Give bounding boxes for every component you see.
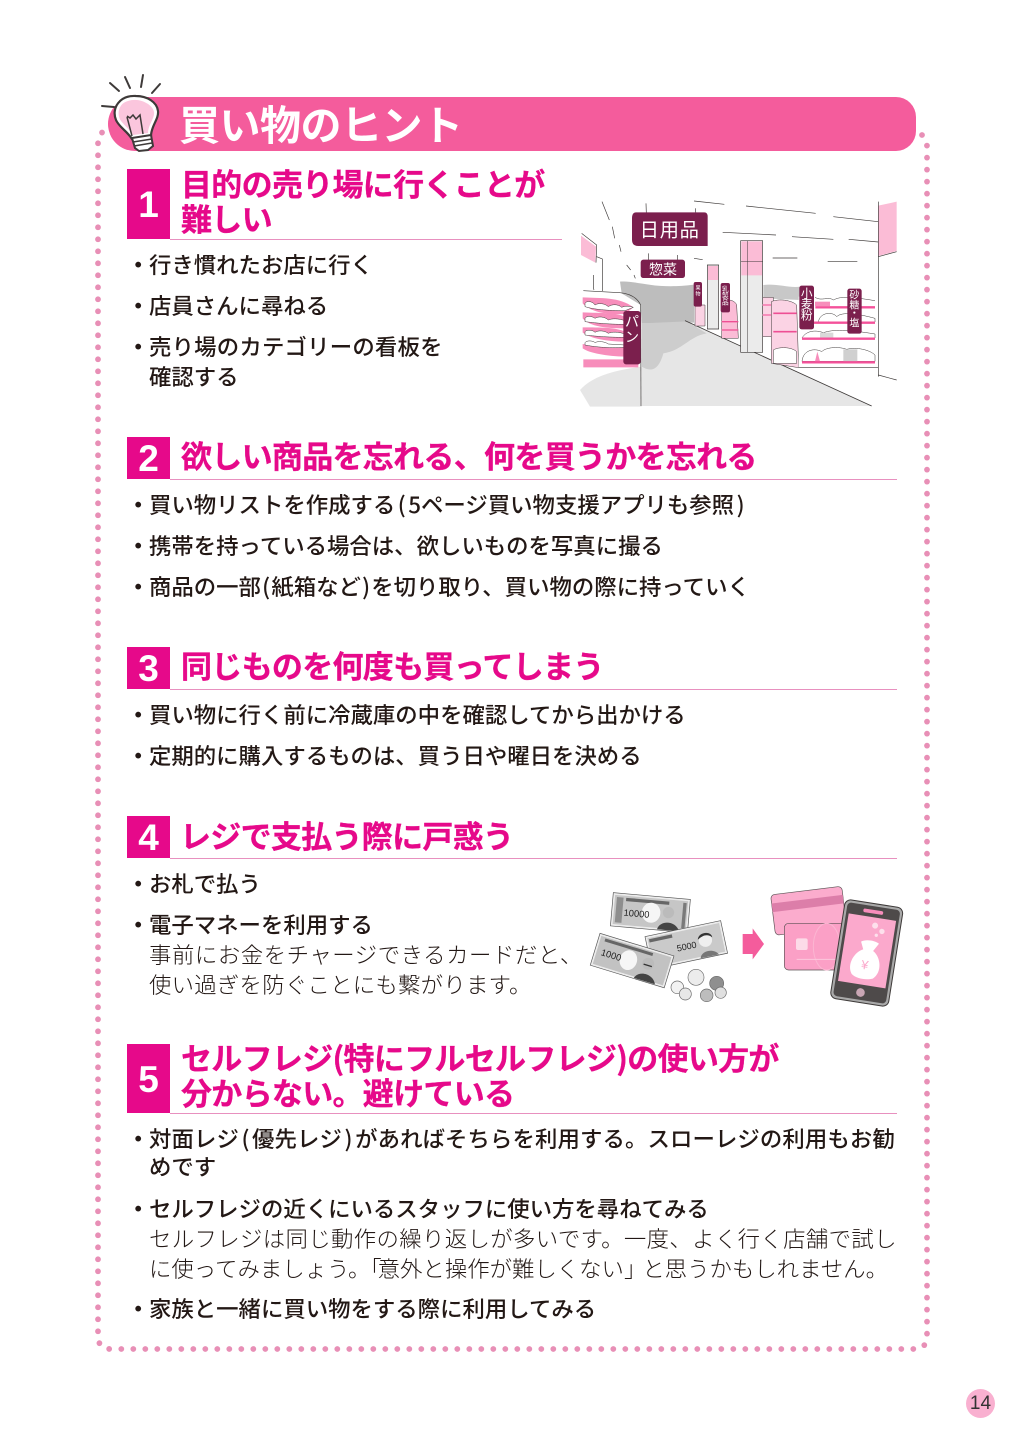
number 5: 5 xyxy=(138,1058,159,1100)
bullet: 買い物リストを作成する(5ページ買い物支援アプリも参照) xyxy=(149,488,745,520)
signs xyxy=(632,212,708,246)
page number: 14 xyxy=(970,1393,991,1414)
bullet: ・ xyxy=(127,908,149,940)
bullet: 電子マネーを利用する xyxy=(149,908,373,940)
illustration: store aisle: ン xyxy=(625,327,639,347)
bullet: ・ xyxy=(127,1292,149,1324)
explanation text: に使ってみましょう。「意外と操作が難しくない」と思うかもしれません。 xyxy=(149,1252,888,1284)
right shelves xyxy=(799,297,878,368)
bullet: お札で払う xyxy=(149,867,261,899)
coins xyxy=(671,969,726,1002)
bullet: ・ xyxy=(127,867,149,899)
illustration: store aisle: 惣菜 xyxy=(649,259,677,279)
illustration: store aisle xyxy=(580,200,897,406)
number 3 xyxy=(127,647,170,689)
bullet: ・ xyxy=(127,488,149,520)
heading 5: セルフレジ(特にフルセルフレジ)の使い方が xyxy=(181,1034,779,1079)
front card xyxy=(784,923,856,970)
phone: ¥ xyxy=(859,958,870,973)
illustration: store aisle: 果 xyxy=(695,284,701,291)
bullet: 携帯を持っている場合は、欲しいものを写真に撮る xyxy=(149,529,663,561)
title: 買い物のヒント xyxy=(179,92,462,152)
bullet: ・ xyxy=(127,248,149,280)
bullet: 商品の一部(紙箱など)を切り取り、買い物の際に持っていく xyxy=(149,570,750,602)
illustration: store aisle: 製 xyxy=(722,290,729,300)
illustration: store aisle: 日用品 xyxy=(640,214,700,242)
bullet: 買い物に行く前に冷蔵庫の中を確認してから出かける xyxy=(149,698,686,730)
bullet: 行き慣れたお店に行く xyxy=(149,248,373,280)
bullet: ・ xyxy=(127,698,149,730)
heading 4: レジで支払う際に戸惑う xyxy=(180,812,513,857)
10000 note xyxy=(610,893,690,933)
explanation text: 使い過ぎを防ぐことにも繋がります。 xyxy=(149,968,532,1000)
rule 1 xyxy=(170,239,562,240)
number 1 xyxy=(127,169,170,239)
bullet: ・ xyxy=(127,529,149,561)
illustration: store aisle: 小 xyxy=(801,284,813,301)
bullet continuation: めです xyxy=(149,1150,216,1182)
right wall xyxy=(878,202,897,407)
number 5 xyxy=(127,1044,170,1113)
5000 note xyxy=(645,921,728,969)
number 2 xyxy=(127,437,170,479)
explanation text: 事前にお金をチャージできるカードだと、 xyxy=(149,938,583,970)
10000 note: 10000 xyxy=(623,908,650,920)
explanation text: セルフレジは同じ動作の繰り返しが多いです。一度、よく行く店舗で試し xyxy=(149,1222,897,1254)
back card xyxy=(771,886,847,935)
bullet: ・ xyxy=(127,739,149,771)
number 2: 2 xyxy=(138,438,159,479)
illustration: store aisle: 粉 xyxy=(801,306,813,323)
rule 2 xyxy=(170,479,897,480)
bullet: ・ xyxy=(127,1122,150,1154)
heading 5: 分からない。避けている xyxy=(181,1069,514,1114)
5000 note: 5000 xyxy=(676,940,697,954)
title banner xyxy=(108,97,916,151)
bullet continuation: 確認する xyxy=(149,360,239,392)
illustration: cash to e-money xyxy=(590,886,904,1007)
heading 5 xyxy=(181,1034,779,1114)
illustration: store aisle: 塩 xyxy=(849,315,859,330)
bread shelf xyxy=(583,297,638,367)
bullet: セルフレジの近くにいるスタッフに使い方を尋ねてみる xyxy=(149,1192,709,1224)
illustration: store aisle: 品 xyxy=(722,297,729,307)
bullet: ・ xyxy=(127,330,150,362)
bullet: 家族と一緒に買い物をする際に利用してみる xyxy=(149,1292,596,1324)
explanation text xyxy=(149,1222,897,1284)
illustration: store aisle: 糖 xyxy=(849,297,859,312)
bullet: ・ xyxy=(127,1192,149,1224)
phone xyxy=(830,899,904,1007)
pillars xyxy=(707,265,719,329)
heading 1: 目的の売り場に行くことが xyxy=(181,160,545,205)
bullet: 対面レジ(優先レジ)があればそちらを利用する。スローレジの利用もお勧 xyxy=(149,1122,895,1154)
arrow xyxy=(743,928,764,959)
illustration: store aisle: 麦 xyxy=(801,295,813,312)
heading 1 xyxy=(181,160,545,240)
number 3: 3 xyxy=(138,648,159,689)
illustration: store aisle: 物 xyxy=(695,290,701,297)
icon: light bulb xyxy=(101,74,161,152)
number 4 xyxy=(127,816,170,858)
shelves far xyxy=(695,300,738,338)
illustration: store aisle: ・ xyxy=(849,305,859,320)
illustration: store aisle: 砂 xyxy=(849,287,859,302)
heading 2: 欲しい商品を忘れる、何を買うかを忘れる xyxy=(181,432,757,477)
bullet: ・ xyxy=(127,570,149,602)
illustration: store aisle: パ xyxy=(625,312,639,332)
heading 3: 同じものを何度も買ってしまう xyxy=(181,642,604,687)
1000 note: 1000 xyxy=(600,947,623,963)
1000 note xyxy=(590,933,674,988)
rule 4 xyxy=(170,858,897,859)
page number xyxy=(966,1389,995,1418)
bullet: ・ xyxy=(127,289,149,321)
bullet: 定期的に購入するものは、買う日や曜日を決める xyxy=(149,739,642,771)
bullet: 売り場のカテゴリーの看板を xyxy=(149,330,443,362)
illustration: store aisle: 乳 xyxy=(722,283,729,293)
number 4: 4 xyxy=(138,817,159,858)
number 1: 1 xyxy=(138,184,159,225)
explanation text xyxy=(149,938,583,1000)
rule 5 xyxy=(170,1113,897,1114)
heading 1: 難しい xyxy=(181,195,272,240)
bullet: 店員さんに尋ねる xyxy=(149,289,328,321)
rule 3 xyxy=(170,689,897,690)
